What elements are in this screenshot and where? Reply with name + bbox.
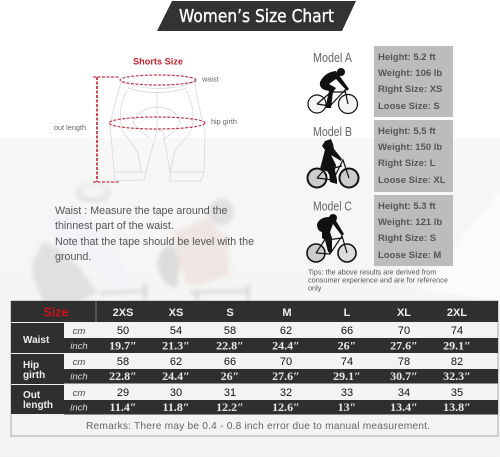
model B stats box: Weight: 150 lb (378, 142, 442, 153)
icon: cyclist B (308, 139, 358, 188)
cm values: 35 (451, 387, 463, 399)
inch values: 12.2″ (216, 400, 244, 414)
model A stats box: Loose Size: S (378, 101, 440, 112)
inch values: 13.4″ (390, 400, 418, 414)
inch values: 21.3″ (162, 338, 190, 352)
label: waist: waist (201, 74, 219, 84)
table header row: XL (397, 307, 411, 319)
cm values: 62 (170, 356, 182, 368)
shorts diagram (110, 82, 205, 181)
row label column: Hip (23, 360, 39, 371)
inch values: 12.6″ (272, 400, 300, 414)
tips note: consumer experience and are for reference (308, 276, 448, 284)
model C stats box: Weight: 121 lb (378, 217, 442, 228)
cm values (117, 325, 463, 399)
tips note: only (308, 284, 322, 292)
table header row: S (226, 307, 234, 319)
inch values: 30.7″ (390, 369, 418, 383)
size table (11, 301, 498, 436)
label: out length: out length (54, 123, 86, 132)
inch values: 22.8″ (216, 338, 244, 352)
icon: cyclist C (307, 214, 356, 262)
title banner (157, 1, 356, 31)
inch values: 13″ (338, 400, 356, 414)
cm values: 34 (398, 387, 410, 399)
model B label: Model B (313, 125, 352, 139)
cm values: 58 (224, 325, 236, 337)
row label column: Out (23, 390, 41, 401)
waist instructions: Waist : Measure the tape around the (55, 205, 228, 217)
table header row: Size (43, 306, 69, 320)
model A stats box: Height: 5.2 ft (378, 52, 436, 63)
inch values: 32.3″ (443, 369, 471, 383)
unit labels: inch (70, 372, 88, 382)
table header row: 2XS (113, 307, 133, 319)
cm values: 33 (341, 387, 353, 399)
table header row: 2XL (447, 307, 467, 319)
inch values (109, 338, 471, 414)
hip girth measurement ellipse (109, 117, 205, 129)
cm values: 78 (398, 356, 410, 368)
cm values: 66 (224, 356, 236, 368)
cm values: 32 (280, 387, 292, 399)
unit labels (70, 326, 88, 414)
model A stats box: Weight: 106 lb (378, 68, 442, 79)
cm values: 70 (398, 325, 410, 337)
model B stats box: Right Size: L (378, 158, 436, 169)
model B stats box: Loose Size: XL (378, 175, 446, 186)
model A label: Model A (313, 51, 353, 65)
model C stats box: Loose Size: M (378, 250, 441, 261)
cm values: 30 (170, 387, 182, 399)
inch values: 27.6″ (390, 338, 418, 352)
unit labels: inch (70, 402, 88, 414)
table header row: M (282, 307, 292, 319)
table header row: XS (169, 307, 183, 319)
inch values: 24.4″ (272, 338, 300, 352)
waist instructions: ground. (55, 251, 91, 263)
out length measurement bracket (93, 77, 120, 182)
waist instructions: Note that the tape should be level with the (55, 236, 254, 248)
model C stats box: Height: 5.3 ft (378, 201, 436, 212)
table header row: L (344, 307, 351, 319)
model A stats box (374, 46, 453, 117)
row label column (11, 323, 64, 414)
cm values: 74 (451, 325, 463, 337)
row label column: length (23, 400, 53, 411)
inch values: 11.4″ (110, 400, 136, 414)
model C label: Model C (313, 200, 352, 214)
cm values: 29 (117, 387, 129, 399)
waist measurement ellipse (120, 75, 196, 85)
cm values: 66 (341, 325, 353, 337)
shorts heading: Shorts Size (133, 56, 183, 66)
cm values: 82 (451, 356, 463, 368)
waist instructions: thinnest part of the waist. (55, 220, 174, 232)
inch values: 29.1″ (333, 369, 361, 383)
inch values: 26″ (221, 369, 239, 383)
inch values: 22.8″ (109, 369, 137, 383)
title banner: Women’s Size Chart (179, 6, 334, 27)
cm values: 54 (170, 325, 182, 337)
unit labels: cm (73, 388, 85, 399)
icon: cyclist A (308, 68, 358, 114)
background photo: faded cyclists (0, 138, 500, 457)
cm values: 58 (117, 356, 129, 368)
cm values: 62 (280, 325, 292, 337)
remarks: Remarks: There may be 0.4 - 0.8 inch error due to manual measurement. (86, 421, 430, 432)
model C stats box: Right Size: S (378, 233, 436, 244)
cm values: 31 (224, 387, 236, 399)
inch values: 11.8″ (163, 400, 189, 414)
table header row (11, 301, 498, 322)
unit labels: inch (70, 341, 88, 352)
unit labels: cm (73, 326, 85, 337)
label: hip girth: hip girth (211, 117, 237, 126)
inch row bands (64, 338, 498, 414)
model A stats box: Right Size: XS (378, 84, 442, 95)
row label column: girth (23, 370, 45, 381)
cm values: 70 (280, 356, 292, 368)
model C stats box (374, 195, 453, 266)
inch values: 29.1″ (443, 338, 471, 352)
inch values: 26″ (338, 338, 356, 352)
cm values: 74 (341, 356, 353, 368)
cm values: 50 (117, 325, 129, 337)
inch values: 13.8″ (443, 400, 471, 414)
inch values: 19.7″ (109, 338, 137, 352)
model B stats box: Height: 5.5 ft (378, 126, 436, 137)
model B stats box (374, 120, 453, 192)
inch values: 24.4″ (162, 369, 190, 383)
unit labels: cm (73, 357, 85, 368)
tips note: Tips: the above results are derived from (308, 268, 436, 276)
inch values: 27.6″ (272, 369, 300, 383)
row label column: Waist (23, 335, 50, 346)
